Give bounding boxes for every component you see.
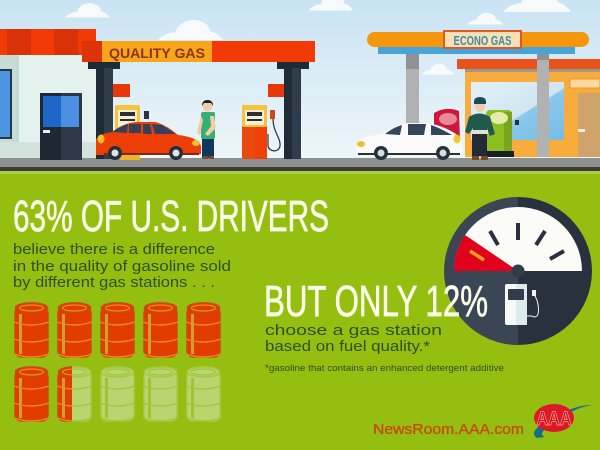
red pump [434,109,460,140]
red car [96,122,201,160]
canopy [367,32,589,54]
source url: NewsRoom.AAA.com [373,421,524,438]
text block: belief: believe there is a difference [13,241,215,258]
AAA logo [534,404,592,438]
right station: Econo Gas [357,31,600,160]
green pump [486,110,519,157]
sky background [0,0,600,160]
door [40,93,82,160]
text block: belief [13,241,231,291]
attendant [465,97,495,160]
text block: belief: in the quality of gasoline sold [13,258,231,275]
building [0,29,96,158]
white car [357,123,463,160]
text block: choice [265,322,442,355]
sign: Quality Gas: QUALITY GAS [109,46,205,61]
AAA logo: AAA [536,409,572,430]
pump left [115,105,149,160]
person at pump [197,100,216,159]
barrel pictogram: 63 percent [14,303,221,421]
text block: belief: by different gas stations . . . [13,274,215,291]
sign: Quality Gas [102,41,212,62]
canopy pillars [88,62,309,159]
sign: Econo Gas: ECONO GAS [454,33,512,48]
clouds [65,0,571,75]
hanging red signs [113,84,284,97]
heading: but only 12%: BUT ONLY 12% [264,277,488,326]
fuel gauge [444,197,592,345]
pump right [242,105,280,159]
building [457,59,600,157]
road [0,158,600,174]
canopy [82,41,315,62]
canopy pillars [406,54,549,157]
window [0,69,12,139]
green background panel [0,171,600,450]
left station: Quality Gas [0,29,315,160]
text block: choice: choose a gas station [265,322,442,339]
heading: 63% of U.S. drivers: 63% OF U.S. DRIVERS [13,192,329,241]
icon: fuel pump [505,284,538,325]
sign: Econo Gas [444,31,521,48]
footnote: *gasoline that contains an enhanced detergent additive [265,363,504,374]
text block: choice: based on fuel quality.* [265,338,430,355]
